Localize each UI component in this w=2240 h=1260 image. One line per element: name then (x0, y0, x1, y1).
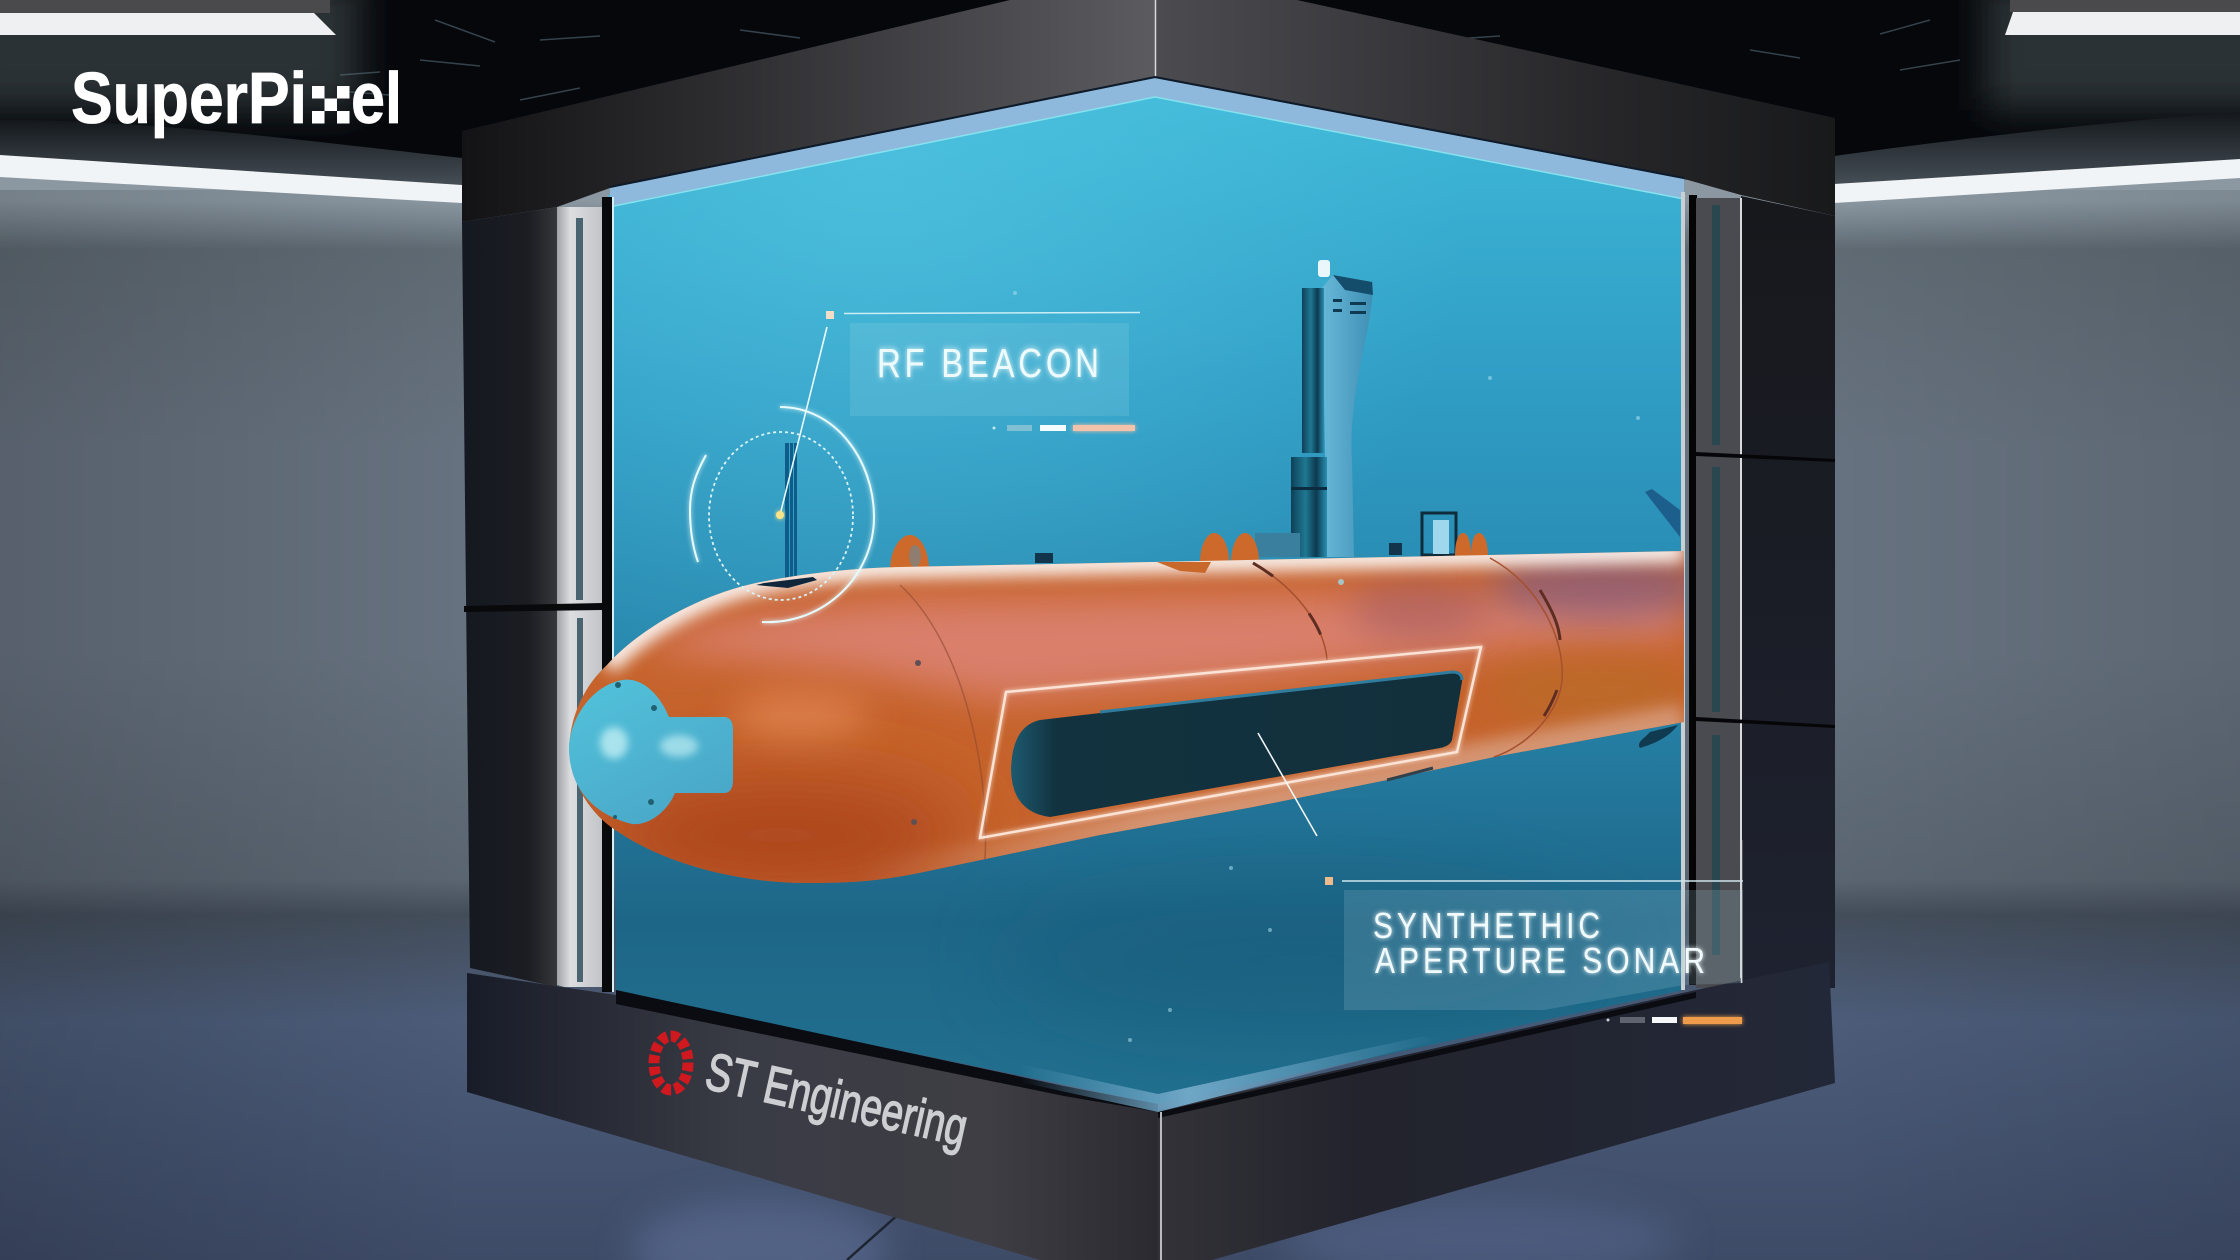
left column (462, 197, 614, 992)
dashed target ring (709, 432, 853, 600)
antenna (785, 443, 797, 585)
lifting lugs (890, 533, 1488, 570)
wordmark start: SuperPi (71, 59, 307, 139)
synthetic aperture sonar window (1011, 672, 1462, 817)
glass bottom trim (616, 990, 1696, 1118)
top rule (1342, 880, 1743, 882)
wordmark end: el (351, 59, 402, 139)
label text: SYNTHETHIC (1373, 906, 1600, 947)
wordmark: ST Engineering (700, 1042, 973, 1158)
outer arcs (690, 407, 874, 622)
base: left face (467, 973, 1158, 1260)
checker x glyph (312, 86, 350, 124)
light strip: upper left (0, 13, 336, 35)
mast (1255, 260, 1373, 557)
base: right face (1158, 962, 1835, 1260)
status bars (1606, 1017, 1742, 1024)
status bars (992, 425, 1135, 431)
icon: red ring mark (654, 1036, 688, 1090)
marker square (1325, 877, 1333, 885)
light strip: lower left (0, 155, 462, 203)
ceiling (0, 0, 2240, 190)
label text: RF BEACON (877, 340, 1099, 386)
panel (850, 323, 1129, 416)
marker square (826, 311, 834, 319)
ST Engineering logo (654, 1036, 973, 1158)
small dark boxes (1035, 543, 1402, 563)
water tank (608, 90, 1684, 1104)
panel (1344, 890, 1743, 1010)
right guide line (1740, 840, 1742, 983)
nose cap (569, 680, 733, 824)
leader line (1258, 733, 1317, 836)
label text (1373, 906, 1705, 982)
leader line (780, 327, 827, 515)
right columns (1681, 192, 1835, 990)
corner line top (1154, 0, 1156, 78)
light strip: upper right (2005, 12, 2240, 35)
glass top band (610, 77, 1684, 206)
corner line base (1160, 1112, 1162, 1260)
sonar highlight frame (980, 647, 1481, 838)
cage sensor (1422, 513, 1456, 555)
antenna base plate (756, 577, 817, 588)
hull (569, 551, 1710, 890)
top rule (844, 312, 1140, 314)
callout: synthetic aperture sonar (1258, 733, 1743, 1024)
vehicle (569, 260, 1710, 890)
label text: APERTURE SONAR (1375, 941, 1705, 982)
top frame: left face (462, 0, 1156, 222)
target dot (776, 511, 784, 519)
SuperPixel logo (71, 59, 402, 139)
callout: RF beacon (690, 311, 1140, 622)
light strip: lower right (1834, 159, 2240, 203)
top frame: right face (1156, 0, 1835, 216)
rear fins (1639, 489, 1680, 748)
display cube (462, 0, 1835, 1260)
